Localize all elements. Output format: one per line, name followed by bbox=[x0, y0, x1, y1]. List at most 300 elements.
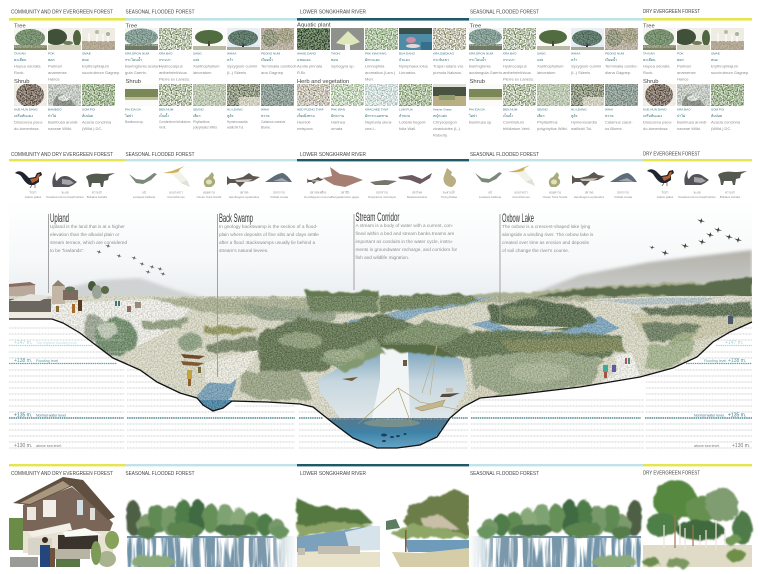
highest flooding level bbox=[9, 340, 752, 346]
species: Hu Leang: wallichii Tul. bbox=[227, 126, 244, 130]
species: Kra Bao (right): anthelminthicus bbox=[503, 70, 531, 75]
category headings: Shrub bbox=[470, 79, 485, 85]
species: Ta Kian (right): ตะเคียน bbox=[643, 57, 656, 62]
animal: buffalo bbox=[86, 173, 115, 199]
people in village bbox=[56, 300, 141, 313]
callout: Stream Corridor: A stream is a body of water with a current, con- bbox=[356, 223, 454, 228]
species: Krajubdkao: KRAJUBDKAO bbox=[433, 52, 455, 56]
species: Kue Hun Dang (right): เครือหันแดง bbox=[643, 113, 662, 118]
species: Pak Wan bbox=[331, 84, 364, 131]
bottom zone colour bar bbox=[9, 464, 752, 466]
species: Peong Num: Terminalia cambodi- bbox=[261, 64, 297, 68]
species: Kue Hun Dang: Dioscorea pseu- bbox=[14, 119, 44, 124]
species: Whae Dang bbox=[297, 28, 330, 75]
animal: lizard: Leiolepis belliana bbox=[133, 195, 155, 199]
species: Smae: Erythrophlajum bbox=[82, 64, 110, 68]
species: Vetiver Grass bbox=[433, 84, 466, 138]
animal: civet (right): Paradoxurus hermaphroditus bbox=[678, 195, 716, 199]
boats and fishers on left bank bbox=[181, 354, 205, 386]
animal: catfish: Hemibagrus wyckioides bbox=[229, 195, 260, 199]
species: Pok bbox=[45, 28, 81, 82]
animal: eel: Mastacembelus bbox=[407, 195, 428, 199]
photo: flooded forest bbox=[125, 478, 297, 569]
species: Pak Khayang: Merr. bbox=[365, 76, 374, 82]
species: Seang bbox=[193, 84, 226, 130]
animal: egret (right): นกยางขาว bbox=[514, 190, 528, 194]
species: Ben Num (right): Combretum bbox=[503, 119, 525, 124]
species: Som Poi: (Willd.) DC. bbox=[82, 126, 102, 131]
flooding level: +138 m. bbox=[728, 358, 746, 364]
species: Pai Ida Da (right): Bambusa sp. bbox=[469, 119, 492, 124]
species: Whai: Calamus caesius bbox=[261, 120, 286, 124]
species: Ta Kian (right): Hopea odorata bbox=[643, 64, 670, 68]
fauna zone headings: DRY EVERGREEN FOREST bbox=[643, 152, 701, 158]
species: Pai Ida Da: PAI IDA DA bbox=[125, 108, 142, 112]
species: Kue Hun Dang: เครือหันแดง bbox=[14, 113, 33, 118]
animal: eel bbox=[398, 173, 432, 199]
species: Whai (right): WHAI bbox=[605, 108, 613, 112]
normal water level: +135 m. bbox=[728, 412, 746, 418]
species: Vetiver Grass: Vetiver Grass bbox=[433, 108, 452, 112]
animal: knife fish: Chitala ornata bbox=[270, 195, 288, 199]
flooding level: +138 m. bbox=[14, 358, 32, 364]
sky bbox=[9, 254, 688, 296]
species: Whae Dang: แหนแดง bbox=[297, 58, 311, 62]
species: Peong Num bbox=[261, 28, 297, 75]
species: Hu Leang: HU LEANG bbox=[227, 108, 243, 112]
river and channels bbox=[317, 296, 620, 418]
category headings: Shrub bbox=[126, 79, 141, 85]
animal: lizard: แย้ bbox=[142, 190, 146, 194]
panel: bottom photo strip bbox=[9, 464, 752, 569]
species: Pak Wan: ornata bbox=[331, 126, 343, 131]
animal: soft-shell turtle: ตะพาบน้ำ bbox=[443, 190, 456, 194]
animal: knife fish bbox=[265, 173, 292, 199]
category headings: Tree bbox=[643, 24, 655, 30]
species: Vetiver Grass: หญ้าแฝก bbox=[433, 113, 447, 118]
species: Krachee That: KRACHEE THAT bbox=[365, 108, 389, 112]
species: Pai Ida Da bbox=[124, 84, 158, 124]
species: Hu Leang: หูลิง bbox=[227, 114, 234, 118]
animal: buffalo: Bubalus bubalis bbox=[87, 195, 108, 199]
species: Ta Kian (right): TA KIAN bbox=[643, 52, 655, 56]
base level: +130 m. bbox=[14, 443, 32, 449]
species: Bua Dang: บัวแดง bbox=[399, 58, 410, 62]
species: Bamboo: BAMBOO bbox=[48, 108, 62, 112]
species: Thon: THON bbox=[331, 52, 340, 56]
species: Whaa: (L.) Skeels bbox=[227, 70, 246, 75]
animal: civet (right) bbox=[678, 170, 716, 199]
category headings: Tree bbox=[126, 24, 137, 30]
callout: Oxbow Lake bbox=[500, 211, 594, 322]
normal water level: Normal water level bbox=[36, 414, 66, 418]
species: Som Poi (right): SOM POI bbox=[711, 108, 724, 112]
animal: civet bbox=[46, 172, 84, 199]
walkers on the right path bbox=[603, 316, 733, 378]
species: Pak Wan: Hanhea bbox=[331, 119, 346, 124]
left sandy ground bbox=[51, 299, 191, 358]
top zone headings bbox=[11, 9, 701, 16]
species: Pok: Parinari bbox=[48, 64, 62, 68]
bottom zone headings: COMMUNITY AND DRY EVERGREEN FOREST bbox=[11, 471, 114, 477]
species: Krachee That: cea L. bbox=[365, 126, 376, 131]
oxbow island bbox=[488, 298, 598, 330]
animal: shell: หอยทราย bbox=[203, 190, 215, 194]
callout: Back Swamp: after a flood .Backswamps usually lie behind a bbox=[219, 240, 316, 245]
species: Kra Bao: Pierre ex Laness. bbox=[159, 76, 190, 82]
species: Bamboo (right) bbox=[677, 84, 710, 131]
species: Peong Num (right): Terminalia cambo- bbox=[605, 64, 638, 68]
species: Hed Pleng Thaf: Hemioli bbox=[297, 119, 310, 124]
species: Vetiver Grass: Chrysopogon bbox=[433, 119, 457, 124]
species: Seang: Phyllanthus bbox=[193, 120, 210, 124]
animal: soft-shell turtle: Trionychidae bbox=[441, 195, 458, 199]
bottom zone headings: SEASONAL FLOODED FOREST bbox=[470, 471, 540, 477]
texture overlay bbox=[9, 296, 752, 420]
species: Whaa (right): (L.) Skeels bbox=[571, 70, 590, 75]
species: Seang: polyphyllus Willd. bbox=[193, 126, 218, 130]
animal: lizard bbox=[129, 173, 157, 199]
fauna colour bar bbox=[9, 159, 752, 161]
species: Pai Ida Da (right) bbox=[468, 84, 502, 124]
species: Thon: ทอน bbox=[331, 58, 339, 62]
bottom zone headings: SEASONAL FLOODED FOREST bbox=[126, 471, 195, 477]
species: Kra Bao (right) bbox=[503, 28, 536, 82]
mountains bbox=[60, 250, 752, 300]
fauna zone headings: SEASONAL FLOODED FOREST bbox=[126, 152, 195, 158]
photo: river right bbox=[380, 478, 469, 567]
species: Kue Hun Dang: do-tomentosa bbox=[14, 126, 39, 131]
species: Pak Khayang bbox=[365, 28, 398, 82]
animal: shell bbox=[197, 172, 222, 199]
species: Sang bbox=[193, 28, 226, 75]
species: Kra Bao (right): KRA BAO bbox=[503, 52, 517, 56]
species: Kra Doon Nam bbox=[124, 28, 162, 75]
top zone headings: LOWER SONGKHRAM RIVER bbox=[300, 10, 366, 16]
species: Thon: Spirogyra sp. bbox=[331, 64, 355, 68]
fish school bbox=[381, 433, 406, 442]
animal: shell (right): หอยทราย bbox=[549, 190, 561, 194]
callout: Upland: Upland is the land that is at a higher bbox=[50, 224, 125, 229]
species: Seang (right): Phyllanthus bbox=[537, 119, 558, 124]
photo: flooded forest right bbox=[469, 478, 643, 569]
tree highlights bbox=[98, 321, 118, 339]
species: Whai: Blume. bbox=[261, 126, 271, 130]
species: Krachee That: Neptunia olera- bbox=[365, 119, 393, 124]
animal: civet: ชะมด bbox=[61, 190, 69, 194]
callout: Upland: Upland bbox=[50, 211, 69, 225]
species: Pak Wan: ผักหวาน bbox=[331, 114, 345, 118]
species: Hu Leang (right): Hymenocardia bbox=[571, 119, 598, 124]
callout: Oxbow Lake: of soil change the river's course. bbox=[502, 248, 569, 253]
animal: giant catfish bbox=[323, 167, 363, 199]
category headings: Shrub bbox=[643, 79, 658, 85]
species: Kue Hun Dang (right) bbox=[643, 83, 676, 131]
species: Whaa (right): หว้า bbox=[571, 57, 577, 62]
animal: slim fish: ปลาสวาย bbox=[376, 190, 388, 194]
animal: giant catfish: ปลาบึก bbox=[341, 190, 350, 194]
species: Ben Num (right): trifoliatum Vent. bbox=[503, 126, 531, 131]
species: Hu Leang (right) bbox=[571, 84, 604, 131]
panel: cross-section background bbox=[9, 247, 752, 448]
species: Kra Doon Nam (right): KRA DRON NUM bbox=[469, 52, 493, 56]
species: Ta Kian: Hopea odorata bbox=[14, 64, 41, 68]
normal water level: Normal water level. bbox=[694, 414, 725, 418]
species: Whai bbox=[261, 84, 294, 130]
species: Pok: POK bbox=[48, 52, 55, 56]
species: Kra Bao (right): Pierre ex Laness. bbox=[503, 76, 534, 82]
animal: lizard (right): แย้ bbox=[488, 190, 492, 194]
callout: Back Swamp: Back Swamp bbox=[219, 211, 253, 225]
category headings: Tree bbox=[14, 24, 26, 30]
species: Kue Hun Dang (right): Dioscorea pseu- bbox=[643, 119, 673, 124]
flooding level: Flooding level bbox=[36, 359, 58, 363]
callout: Back Swamp: plain where deposits of fine silts and clays settle bbox=[219, 232, 319, 237]
animal: catfish (right): Hemibagrus wyckioides bbox=[574, 195, 605, 199]
fauna zone headings bbox=[11, 152, 701, 158]
species: Lum Pua: ลำพวน bbox=[399, 114, 411, 118]
species: Ben Num: BEN NUM bbox=[159, 108, 174, 112]
species: Bamboo (right): naceae Willd. bbox=[677, 126, 701, 131]
species: Kue Hun Dang (right): KUE HUN DANG bbox=[643, 108, 667, 112]
species: Kue Hun Dang (right): do-tomentosa bbox=[643, 126, 668, 131]
species: Sang (right): SANG bbox=[537, 52, 546, 56]
animal: slim fish bbox=[368, 180, 397, 199]
animal: buffalo: ควายป่า bbox=[92, 190, 103, 194]
callout: Back Swamp: stream's natural levees. bbox=[219, 248, 268, 253]
species: Pok: พอก bbox=[48, 58, 55, 62]
species: Krajubdkao: pumula Nakano. bbox=[433, 70, 462, 75]
species: Kra Doon Nam: Barringtonia acutan- bbox=[125, 64, 162, 68]
highest flooding level: +147 m. bbox=[14, 340, 32, 346]
category headings: Aquatic plant bbox=[297, 22, 331, 28]
animal: small catfish: ปลากดเหลือง bbox=[310, 190, 327, 194]
normal water level: +135 m. bbox=[14, 412, 32, 418]
level ruled lines bbox=[9, 328, 752, 448]
category headings: Herb and vegetation bbox=[297, 79, 349, 85]
right green bands bbox=[640, 302, 752, 350]
species: Peong Num: เปือยน้ำ bbox=[261, 57, 273, 62]
species: Hu Leang (right): wallichii Tul. bbox=[571, 126, 592, 131]
category headings bbox=[14, 22, 658, 85]
species: Sang: SANG bbox=[193, 52, 202, 56]
callout: Oxbow Lake: The oxbow is a crescent-shaped lake lying bbox=[502, 224, 591, 229]
callout: Upland: to be "lowlands". bbox=[50, 248, 85, 253]
species: Kra Bao: KRA BAO bbox=[159, 52, 173, 56]
species: Whae Dang: R.Br. bbox=[297, 70, 306, 75]
callout: Back Swamp bbox=[218, 211, 319, 377]
animal: catfish: ปลากด bbox=[240, 190, 249, 194]
submerged sandbar bbox=[364, 419, 420, 427]
species: Smae (right) bbox=[711, 28, 749, 75]
flooding level bbox=[9, 358, 752, 364]
species: Ta Kian bbox=[14, 28, 47, 75]
callout: Upland: stream terrace, which are considered bbox=[50, 240, 128, 245]
species: Kra Bao: กระเบา bbox=[159, 58, 171, 62]
species: Seang (right): polyphyllus Willd. bbox=[537, 126, 568, 131]
species: Peong Num (right): PEONG NUM bbox=[605, 52, 625, 56]
species: Som Poi: ส้มป่อย bbox=[82, 113, 93, 118]
village buildings bbox=[9, 280, 109, 319]
animal: small catfish: Hemibagrus nemurus bbox=[304, 195, 332, 199]
base level: above sea level. bbox=[694, 444, 720, 448]
category headings: Tree bbox=[470, 24, 481, 30]
animal: buffalo (right): Bubalus bubalis bbox=[720, 195, 741, 199]
animal: catfish (right) bbox=[572, 172, 605, 199]
species: Smae: succirubrum Gagnep. bbox=[82, 70, 120, 75]
species: Kra Bao bbox=[159, 28, 192, 82]
species: Ta Kian: TA KIAN bbox=[14, 52, 26, 56]
species: Smae (right): Erythrophlajum bbox=[711, 64, 739, 68]
species: Bua Dang: Nymphaea lotus bbox=[399, 64, 428, 68]
species: Ben Num: Vent. bbox=[159, 126, 166, 130]
species: Pai Ida Da: Bambusa sp. bbox=[125, 120, 144, 124]
species: Hu Leang (right): HU LEANG bbox=[571, 108, 587, 112]
species: Whaa: Syzygium cumini bbox=[227, 64, 257, 68]
species: Pai Ida Da: ไผ่ป่า bbox=[124, 113, 133, 118]
species: Som Poi (right) bbox=[711, 84, 744, 131]
species: Ta Kian: Roxb. bbox=[14, 70, 24, 75]
species: Kra Bao (right): Hydnocarpus bbox=[503, 64, 527, 68]
base level: above sea level. bbox=[36, 444, 62, 448]
species: Bamboo (right): ป่าไผ่ bbox=[677, 113, 685, 118]
species: Whai (right): หวาย bbox=[605, 114, 614, 118]
callout: Stream Corridor: Stream Corridor bbox=[356, 210, 400, 224]
animal: jungle fowl: ไก่ป่า bbox=[29, 190, 37, 194]
species: Som Poi: Acacia concinna bbox=[82, 119, 112, 124]
species: Thon bbox=[331, 28, 364, 68]
species: Ben Num: เบ็นน้ำ bbox=[159, 112, 169, 118]
species: Seang (right) bbox=[537, 84, 570, 131]
species: Kra Bao (right): กระเบา bbox=[503, 58, 515, 62]
species: Hed Pleng Thaf bbox=[297, 84, 330, 131]
species: Bamboo: ป่าไผ่ bbox=[48, 113, 56, 118]
species: Hu Leang (right): หูลิง bbox=[571, 114, 578, 118]
species: Kra Doon Nam (right): acutangula Gaertn. bbox=[469, 70, 503, 75]
species: Som Poi bbox=[82, 84, 115, 131]
panel: fauna strip bbox=[9, 152, 752, 199]
photo: wooden house bbox=[9, 477, 119, 567]
species: Seang: SEANG bbox=[193, 108, 204, 112]
animal: lizard (right): Leiolepis belliana bbox=[479, 195, 501, 199]
species: Peong Num (right) bbox=[605, 28, 638, 75]
animal: buffalo (right) bbox=[718, 171, 747, 199]
animal: shell (right) bbox=[543, 172, 568, 199]
species: Whai: WHAI bbox=[261, 108, 269, 112]
ground profile bbox=[9, 319, 752, 448]
species: Bamboo (right): KRA BAO bbox=[677, 108, 691, 112]
species: Kra Doon Nam: กระโดนน้ำ bbox=[125, 57, 142, 62]
fauna zone headings: LOWER SONGKHRAM RIVER bbox=[300, 152, 366, 158]
species: Lum Pua: folia Wall. bbox=[399, 126, 416, 131]
species: Hu Leang bbox=[227, 84, 260, 130]
species: Som Poi (right): ส้มป่อย bbox=[711, 113, 722, 118]
animal: slim fish: Notopterus microlepis bbox=[368, 195, 397, 199]
animal: jungle fowl (right) bbox=[647, 169, 674, 199]
species: Kra Doon Nam: gula Gaertn. bbox=[125, 70, 147, 75]
species: Kra Doon Nam: KRA DRON NUM bbox=[125, 52, 149, 56]
base level bbox=[14, 443, 750, 449]
fauna zone headings: SEASONAL FLOODED FOREST bbox=[470, 152, 540, 158]
species: Kue Hun Dang: KUE HUN DANG bbox=[14, 108, 38, 112]
species: Peong Num: PEONG NUM bbox=[261, 52, 281, 56]
species: Bua Dang: BUA DANG bbox=[399, 52, 416, 56]
species: Pok (right) bbox=[674, 28, 710, 82]
animal: jungle fowl: Gallus gallus bbox=[25, 195, 42, 199]
species: Lum Pua: LUM PUA bbox=[399, 108, 414, 112]
animal: knife fish (right): Chitala ornata bbox=[614, 195, 632, 199]
callout: Oxbow Lake: created over time as erosion and deposits bbox=[502, 240, 590, 245]
animal: catfish (right): ปลากด bbox=[585, 190, 594, 194]
species: Kra Doon Nam (right): Barringtonia bbox=[469, 64, 491, 68]
species: Krajubdkao: Trapa natans var. bbox=[433, 64, 464, 68]
species: Bua Dang: Linnaeus. bbox=[399, 70, 416, 75]
species: Ta Kian (right) bbox=[643, 28, 676, 75]
species: Whae Dang: WHAE DANG bbox=[297, 52, 317, 56]
animal: shell: Oscan Tetra Smaht bbox=[197, 195, 222, 199]
animal: knife fish (right): ปลากราย bbox=[617, 190, 629, 194]
species: Ta Kian (right): Roxb. bbox=[643, 70, 653, 75]
animal: giant catfish: Pangasianodon gigas bbox=[331, 195, 359, 199]
species: Bua Dang bbox=[399, 28, 432, 75]
callout: Stream Corridor bbox=[354, 210, 458, 290]
photo: river left bbox=[297, 478, 380, 567]
species: Smae bbox=[82, 28, 120, 75]
species: Ben Num (right): BEN NUM bbox=[503, 108, 518, 112]
species: Smae (right): succirubrum Gagnep. bbox=[711, 70, 749, 75]
top zone headings: DRY EVERGREEN FOREST bbox=[643, 9, 701, 15]
fishing net and boat bbox=[358, 345, 460, 426]
animal: knife fish (right) bbox=[610, 173, 637, 199]
species: Pai Ida Da (right): PAI IDA DA bbox=[469, 108, 486, 112]
species: Peong Num (right): diana Gagnep. bbox=[605, 70, 631, 75]
species: Bamboo (right): Bambusa arundi- bbox=[677, 119, 708, 124]
species: Whaa: WHAA bbox=[227, 52, 237, 56]
animal: shell (right): Oscan Tetra Smaht bbox=[543, 195, 568, 199]
species: Kue Hun Dang bbox=[14, 83, 47, 131]
animal: jungle fowl (right): ไก่ป่า bbox=[661, 190, 669, 194]
species: Whai (right): Calamus caesi- bbox=[605, 119, 633, 124]
callout: Stream Corridor: important as conduits in the water cycle, instru- bbox=[356, 239, 454, 244]
species: Vetiver Grass: zizanioides (L.) bbox=[433, 126, 461, 131]
animal: catfish bbox=[227, 173, 260, 199]
fauna zone headings: COMMUNITY AND DRY EVERGREEN FOREST bbox=[11, 152, 114, 158]
animal: civet: Paradoxurus hermaphroditus bbox=[46, 195, 84, 199]
species: Hed Pleng Thaf: เห็ดเผิ่งทาม bbox=[297, 112, 315, 118]
species: Bamboo: Bambusa arundi- bbox=[48, 119, 79, 124]
callout: Upland bbox=[48, 211, 128, 293]
animal: eel: ปลาไหล bbox=[412, 190, 422, 194]
boats on river bbox=[342, 360, 460, 397]
species: Krachee That bbox=[365, 84, 398, 131]
normal water level bbox=[9, 412, 752, 418]
animal: civet (right): ชะมด bbox=[693, 190, 701, 194]
top zone headings: SEASONAL FLOODED FOREST bbox=[126, 10, 195, 16]
species: Sang (right): lanceatum bbox=[537, 70, 556, 75]
bottom zone headings: DRY EVERGREEN FOREST bbox=[643, 470, 701, 476]
species: Kra Bao: Hydnocarpus bbox=[159, 64, 183, 68]
species: Whae Dang: Azolla pinnata bbox=[297, 64, 323, 68]
deep water below normal level bbox=[328, 418, 449, 448]
species: Sang: Xanthophyllum bbox=[193, 64, 220, 68]
species: Pak Khayang: ผักกะแยง bbox=[365, 58, 380, 62]
species: Smae (right): สมอ bbox=[711, 58, 718, 62]
flooding level: Flooding level. bbox=[704, 359, 727, 363]
species: Hed Pleng Thaf: netspora bbox=[297, 126, 313, 131]
species: Peong Num (right): เปือยน้ำ bbox=[605, 57, 617, 62]
photo: dry evergreen forest bbox=[643, 478, 752, 568]
callout: Oxbow Lake: alongside a winding river. The oxbow lake is bbox=[502, 232, 594, 237]
